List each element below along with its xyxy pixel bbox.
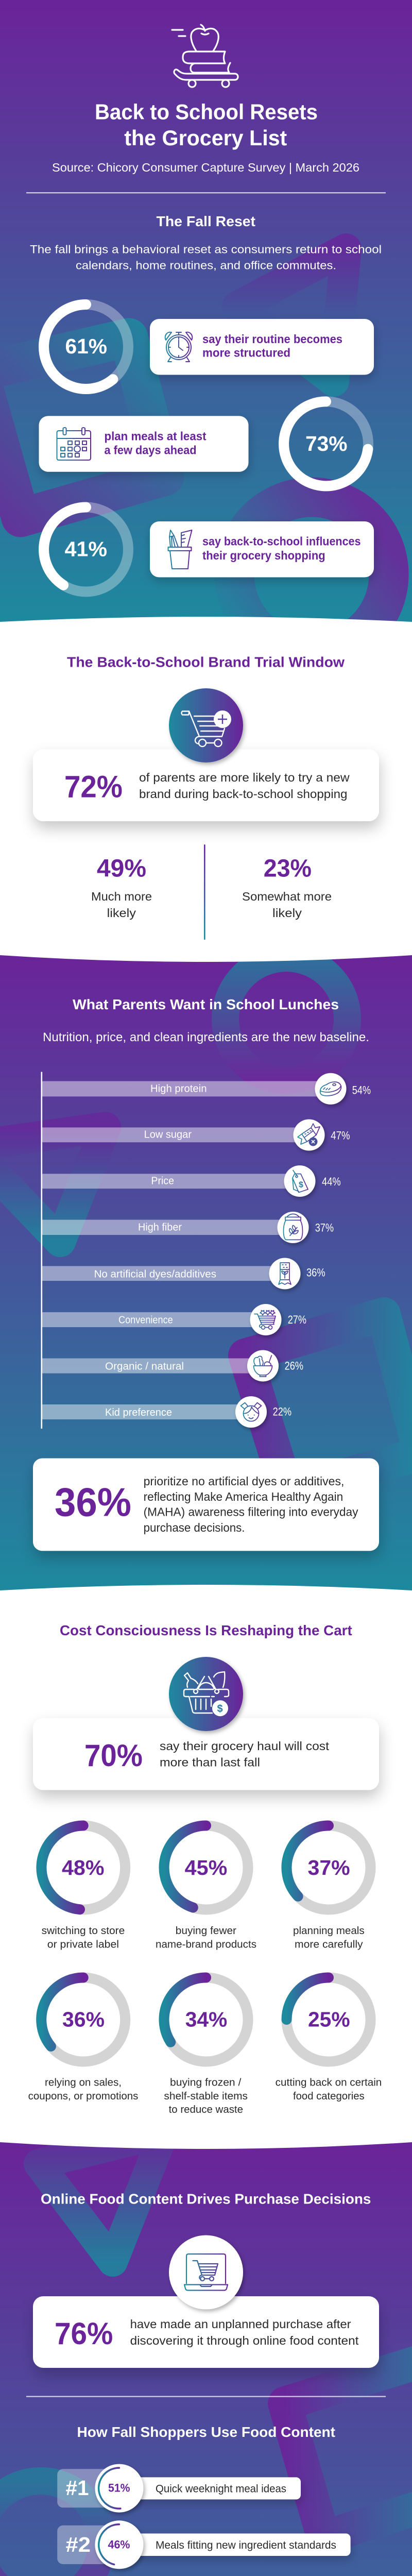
intro text: The fall brings a behavioral reset as consumers return to school [30,243,382,256]
stat ring: 36%: relying on sales, [45,2077,122,2089]
stat ring: 25%: food categories [293,2091,365,2102]
rank row 2: 46% [108,2538,130,2551]
bar: kid preference 22% [42,1396,291,1428]
bar: kid preference 22%: Kid preference [105,1407,172,1418]
stat ring: 48%: or private label [47,1939,119,1951]
panel: what parents want [33,996,379,1551]
card: plan meals [39,416,248,472]
panel: brand trial window [33,654,379,940]
stat ring: 36%: coupons, or promotions [28,2091,138,2102]
stat ring: 41%: 41% [65,537,107,561]
card: 76% [33,2296,379,2368]
card: 76%: discovering it through online food content [130,2334,359,2347]
heading: Online Food Content Drives Purchase Decisions [41,2191,371,2207]
bar: kid preference 22%: 22% [273,1405,291,1418]
stat ring: 34% [164,1977,248,2115]
stat ring: 25%: cutting back on certain [276,2077,382,2089]
stat ring: 48%: switching to store [42,1925,125,1937]
bar: high protein 54% [42,1073,371,1105]
stat ring: 48%: 48% [62,1856,104,1879]
card: 72%: 72% [64,770,123,804]
card: 70%: more than last fall [160,1756,260,1769]
stat: 49% much more likely [91,855,152,920]
panel: cost consciousness [28,1622,382,2115]
rank row 1: Quick weeknight meal ideas [156,2483,286,2495]
card: 72% [33,749,379,821]
stat: 49% much more likely: Much more [91,890,152,903]
title [95,100,318,150]
stat ring: 41% [44,507,128,591]
text: more structured [202,346,290,360]
intro text: calendars, home routines, and office commutes. [76,259,336,272]
icon: shopping cart with plus [169,688,243,762]
stat: 23% somewhat more likely [242,855,332,920]
icon: grocery basket with dollar: $ [217,1703,223,1715]
bar chart: lunch priorities [41,1072,371,1429]
stat ring: 37%: 37% [308,1856,350,1879]
bar: high fiber 37% [42,1212,334,1243]
stat ring: 45%: name-brand products [156,1939,256,1951]
icon: calendar [57,428,91,460]
bar: low sugar 47%: Low sugar [144,1129,192,1141]
callout: 36%: (MAHA) awareness filtering into everyday [144,1505,358,1519]
stat ring: 61%: 61% [65,334,107,358]
bar: no artificial dyes 36%: 36% [306,1266,325,1279]
bar: high protein 54%: 54% [352,1083,371,1096]
text: plan meals at least [104,430,207,443]
stat ring: 36%: 36% [62,2007,105,2031]
rank row 2: Meals fitting new ingredient standards [156,2539,336,2551]
text: say back-to-school influences [202,534,360,548]
stat ring: 73%: 73% [305,432,347,455]
panel: the fall reset [30,213,382,591]
bar: convenience 27%: 27% [288,1313,306,1326]
bar: organic natural 26%: 26% [285,1359,303,1372]
bar: convenience 27%: Convenience [118,1314,173,1326]
panel: online food content [33,2191,379,2368]
stat ring: 61% [44,304,128,389]
card: 70%: say their grocery haul will cost [160,1739,330,1753]
stat ring: 37%: more carefully [295,1939,363,1951]
bar: low sugar 47%: 47% [331,1129,350,1142]
icon: grocery basket with dollar [169,1657,243,1731]
text [104,430,207,456]
stat ring: 25% [276,1977,382,2102]
text: a few days ahead [104,443,197,456]
rank row 1: #1 [66,2476,89,2500]
stat ring: 34%: shelf-stable items [164,2091,248,2102]
stat: 23% somewhat more likely: likely [272,906,302,920]
stat ring: 48% [41,1826,125,1951]
bar: price 44%: 44% [322,1175,341,1188]
text: say their routine becomes [202,332,342,346]
callout: 36%: prioritize no artificial dyes or additives, [144,1475,344,1488]
text [202,534,360,562]
stat ring: 37%: planning meals [293,1925,365,1937]
stat ring: 45%: 45% [185,1856,227,1879]
callout: 36%: reflecting Make America Healthy Again [144,1490,343,1503]
source line: Source: Chicory Consumer Capture Survey | March 2026 [52,161,359,174]
stat ring: 34%: to reduce waste [169,2104,243,2115]
icon: apple on books on skateboard [172,25,238,87]
card: 70% [33,1718,379,1790]
panel: header [26,25,386,193]
stat ring: 34%: buying frozen / [170,2077,242,2089]
heading: What Parents Want in School Lunches [73,996,339,1012]
bar: price 44%: Price [151,1176,174,1187]
heading: The Back-to-School Brand Trial Window [67,654,345,670]
stat: 23% somewhat more likely: 23% [264,855,312,882]
title: the Grocery List [124,126,287,150]
stat ring: 73% [284,401,368,486]
stat ring: 37% [286,1826,371,1951]
bar: price 44% [42,1165,341,1197]
stat: 49% much more likely: likely [107,906,136,920]
heading: The Fall Reset [157,213,255,229]
rank row 2: #2 [66,2533,91,2556]
bar: organic natural 26%: Organic / natural [105,1361,184,1372]
bar: no artificial dyes 36% [42,1258,325,1289]
callout: 36%: 36% [55,1480,131,1525]
card: 76%: 76% [55,2316,113,2351]
bar: convenience 27% [42,1304,306,1335]
stat ring: 45% [156,1826,256,1951]
card: 76%: have made an unplanned purchase after [130,2317,351,2331]
heading: Cost Consciousness Is Reshaping the Cart [60,1622,352,1638]
bar: no artificial dyes 36%: No artificial dyes/additives [94,1269,216,1280]
bar: high fiber 37%: High fiber [138,1222,182,1233]
text [202,332,342,360]
icon: laptop with cart [169,2235,243,2309]
rank row 2 [57,2520,351,2569]
bar: high protein 54%: High protein [150,1083,207,1094]
bar: low sugar 47% [42,1119,350,1151]
intro text [30,243,382,272]
icon: pencil cup [168,530,192,569]
stat ring: 36% [28,1977,138,2102]
title: Back to School Resets [95,100,318,124]
card: routine [150,319,374,375]
bar: price 44%: $ [299,1181,303,1189]
callout: 36%: purchase decisions. [144,1521,245,1534]
card: 72%: brand during back-to-school shopping [139,787,347,801]
bar: high fiber 37%: 37% [315,1221,334,1234]
stat ring: 34%: 34% [185,2007,227,2031]
heading: How Fall Shoppers Use Food Content [77,2424,335,2440]
callout: 36% [33,1458,379,1551]
panel: how fall shoppers use food content [33,2424,379,2576]
stat: 49% much more likely: 49% [97,855,146,882]
card: 72%: of parents are more likely to try a new [139,771,350,784]
rank row 1: 51% [108,2481,130,2494]
stat: 23% somewhat more likely: Somewhat more [242,890,332,903]
stat ring: 45%: buying fewer [176,1925,236,1937]
stat ring: 25%: 25% [308,2007,350,2031]
white section backgrounds [0,617,412,2576]
bar: organic natural 26% [42,1350,303,1382]
text: their grocery shopping [202,549,325,562]
icon: alarm clock [165,332,192,362]
rank row 1 [57,2464,301,2513]
subheading: Nutrition, price, and clean ingredients are the new baseline. [43,1030,369,1044]
card: influences [150,521,374,577]
card: 70%: 70% [84,1738,143,1773]
